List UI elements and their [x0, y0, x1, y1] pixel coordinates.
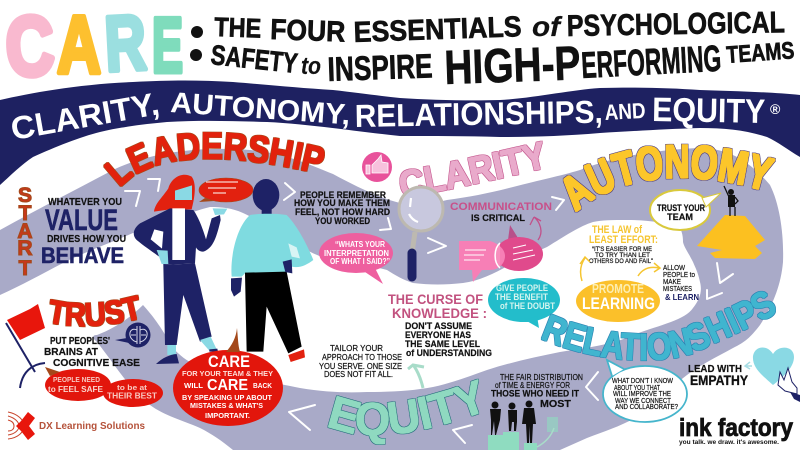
title line 2: INSPIRE	[327, 47, 433, 89]
icon: heart in hand	[745, 347, 800, 402]
heading: clarity: CLARITY	[399, 140, 543, 194]
heading: equity: EQUITY	[328, 378, 480, 445]
text: law of least effort: THE LAW of	[592, 224, 642, 236]
heading: start: T	[19, 202, 32, 225]
text: curse of knowledge: KNOWLEDGE :	[392, 305, 487, 321]
callout: to be at their best: THEIR BEST	[107, 392, 157, 400]
banner subtitle: ®	[770, 101, 781, 117]
callout: care for your team: WILL	[184, 381, 203, 390]
callout: what's your interpretation: OF WHAT I SAID?”	[330, 257, 390, 266]
callout: care for your team: MISTAKES & WHAT'S	[190, 401, 263, 410]
callout: give people the benefit of the doubt	[488, 278, 560, 328]
title line 1: ESSENTIALS	[353, 11, 522, 49]
text: law of least effort	[589, 224, 658, 265]
icon: thumbs up	[362, 152, 392, 182]
text: whatever you value drives how you behave: WHATEVER YOU	[48, 196, 122, 208]
arrows: promote learning	[580, 257, 660, 281]
text: curse of knowledge: of UNDERSTANDING	[406, 348, 492, 359]
banner subtitle: RELATIONSHIPS,	[354, 94, 603, 134]
heading: trust: TRUST	[49, 294, 140, 328]
icon: magnifying glass	[399, 187, 443, 277]
text: tailor your approach: TAILOR YOUR	[330, 343, 383, 353]
text: curse of knowledge: EVERYONE HAS	[405, 330, 471, 341]
text: tailor your approach: APPROACH TO THOSE	[322, 352, 402, 362]
title line 1: THE	[214, 12, 262, 44]
callout: what's your interpretation	[319, 233, 393, 284]
text: the fair distribution: THOSE WHO NEED IT	[491, 388, 579, 400]
figure: woman leader	[134, 175, 227, 364]
banner subtitle: EQUITY	[652, 91, 766, 131]
text: the fair distribution: THE FAIR DISTRIBUTION	[500, 372, 583, 382]
heading: start: T	[19, 257, 32, 280]
title line 1: of	[532, 11, 563, 42]
icon: overlapping pink speech bubbles	[459, 217, 543, 282]
title line 1	[214, 6, 785, 49]
text: allow people to make mistakes and learn: PEOPLE to	[663, 270, 695, 279]
heading: start	[17, 184, 33, 280]
title line 2: SAFETY	[209, 39, 299, 79]
callout: give people the benefit of the doubt: THE BENEFIT	[495, 292, 548, 302]
winding road background	[0, 148, 783, 450]
callout: what don't I know about you: WILL IMPROVE THE	[613, 391, 671, 398]
text: allow people to make mistakes and learn: MAKE	[663, 277, 681, 286]
heading: start: A	[17, 220, 33, 243]
arrow: mint up-left	[408, 365, 424, 388]
callout: care for your team: CARE	[207, 377, 248, 394]
heading: start: S	[18, 184, 32, 207]
title: CARE: C	[3, 0, 56, 94]
text: lead with empathy: LEAD WITH	[688, 364, 742, 375]
text: whatever you value drives how you behave: VALUE	[45, 204, 118, 237]
callout: care for your team: FOR YOUR TEAM & THEY	[182, 369, 273, 378]
title line 2: HIGH-P	[444, 37, 581, 95]
text: curse of knowledge	[388, 292, 492, 359]
text: whatever you value drives how you behave	[41, 196, 126, 268]
callout: trust your team: TEAM	[667, 212, 693, 223]
callout: what don't I know about you: WHAT DON'T I KNOW	[612, 378, 673, 385]
DX Learning Solutions logo: DX Learning Solutions	[39, 420, 145, 432]
callout: trust your team	[650, 190, 721, 230]
icon: person on yellow hill	[697, 186, 765, 259]
text: people remember: HOW YOU MAKE THEM	[294, 198, 390, 209]
title: CARE: E	[152, 1, 183, 89]
heading: start: R	[17, 237, 33, 260]
text: law of least effort: TO TRY THAN LET	[595, 252, 650, 259]
text: people remember: PEOPLE REMEMBER	[300, 190, 386, 201]
text: people remember: FEEL, NOT HOW HARD	[295, 207, 390, 218]
text: the fair distribution: of TIME & ENERGY FOR	[495, 380, 570, 390]
text: curse of knowledge: THE SAME LEVEL	[405, 339, 480, 350]
figure: man listening	[231, 179, 313, 362]
banner subtitle: AND	[604, 98, 646, 125]
callout: care for your team: CARE	[208, 352, 250, 371]
text: tailor your approach: DOES NOT FIT ALL.	[324, 369, 393, 379]
text: whatever you value drives how you behave: BEHAVE	[41, 243, 124, 268]
text: communication is critical: IS CRITICAL	[471, 213, 525, 224]
text: put people's brains at cognitive ease	[44, 336, 140, 369]
text: people remember: YOU WORKED	[315, 216, 370, 227]
heading: leadership: LEADERSHIP	[103, 132, 325, 187]
callout: care for your team	[173, 328, 283, 426]
text: people remember	[294, 190, 390, 227]
text: communication is critical: COMMUNICATION	[450, 201, 552, 213]
text: tailor your approach	[319, 343, 402, 379]
text: allow people to make mistakes and learn: ALLOW	[663, 263, 686, 272]
text: put people's brains at cognitive ease: BRAINS AT	[44, 347, 98, 358]
callout: promote learning: PROMOTE	[592, 281, 644, 296]
title: CARE	[3, 0, 183, 94]
navy banner	[0, 80, 800, 185]
text: law of least effort: “IT'S EASIER FOR ME	[592, 246, 653, 253]
callout: people need to feel safe	[45, 367, 111, 401]
text: lead with empathy: EMPATHY	[690, 373, 748, 388]
text: put people's brains at cognitive ease: PUT PEOPLES'	[50, 336, 110, 347]
text: put people's brains at cognitive ease: COGNITIVE EASE	[53, 358, 140, 369]
callout: trust your team: TRUST YOUR	[657, 203, 705, 213]
banner subtitle	[8, 85, 781, 147]
icon: red flag	[6, 304, 45, 388]
banner subtitle: CLARITY,	[8, 85, 162, 147]
heading: autonomy: AUTONOMY	[562, 144, 776, 212]
callout: promote learning: LEARNING	[582, 294, 655, 313]
text: allow people to make mistakes and learn: MISTAKES	[663, 284, 692, 293]
title line 2: to	[301, 53, 321, 80]
heading: relationships: RELATIONSHIPS	[540, 290, 776, 362]
callout: to be at their best	[103, 379, 163, 407]
callout: people need to feel safe: PEOPLE NEED	[53, 375, 101, 384]
callout: give people the benefit of the doubt: of THE DOUBT	[500, 301, 555, 311]
DX Learning Solutions logo	[8, 412, 145, 440]
icon: brain speech bubble	[115, 322, 150, 348]
banner subtitle: AUTONOMY,	[170, 87, 351, 132]
arrows: white chevrons	[125, 179, 733, 443]
callout: care for your team: IMPORTANT.	[205, 411, 250, 420]
callout: what don't I know about you: AND COLLABORATE?	[615, 404, 678, 411]
callout: what don't I know about you: ABOUT YOU THAT	[614, 385, 661, 392]
text: lead with empathy	[688, 364, 748, 388]
text: whatever you value drives how you behave: DRIVES HOW YOU	[47, 233, 126, 245]
callout: care for your team: BY SPEAKING UP ABOUT	[182, 393, 272, 402]
text: tailor your approach: YOU SERVE. ONE SIZE	[319, 361, 402, 371]
callout: give people the benefit of the doubt: GIVE PEOPLE	[496, 283, 548, 293]
colon dots	[190, 26, 203, 61]
text: allow people to make mistakes and learn: & LEARN	[665, 292, 699, 302]
callout: what's your interpretation: “WHATS YOUR	[335, 240, 385, 249]
title: CARE: A	[57, 0, 101, 91]
icon: three people on mint blocks	[488, 400, 558, 450]
text: curse of knowledge: THE CURSE OF	[388, 292, 483, 307]
callout: what's your interpretation: INTERPRETATION	[324, 249, 389, 258]
text: the fair distribution	[491, 372, 583, 410]
callout: what don't I know about you: WAY WE CONNECT	[615, 398, 672, 405]
speech bubble: leader	[199, 178, 253, 202]
callout: to be at their best: to be at	[117, 383, 148, 392]
callout: people need to feel safe: to FEEL SAFE	[48, 385, 104, 394]
title line 2	[209, 37, 795, 95]
text: allow people to make mistakes and learn	[663, 263, 699, 302]
text: law of least effort: OTHERS DO AND FAIL”	[589, 258, 653, 265]
title line 1: FOUR	[270, 14, 346, 49]
text: law of least effort: LEAST EFFORT:	[589, 234, 658, 246]
callout: what don't I know about you	[603, 360, 687, 422]
text: communication is critical	[450, 201, 552, 224]
callout: promote learning	[576, 280, 660, 322]
callout: care for your team: BACK	[253, 381, 273, 390]
ink factory logo: you talk. we draw. it's awesome.	[679, 439, 779, 446]
text: the fair distribution: MOST	[540, 398, 572, 410]
text: curse of knowledge: DON'T ASSUME	[405, 321, 472, 332]
